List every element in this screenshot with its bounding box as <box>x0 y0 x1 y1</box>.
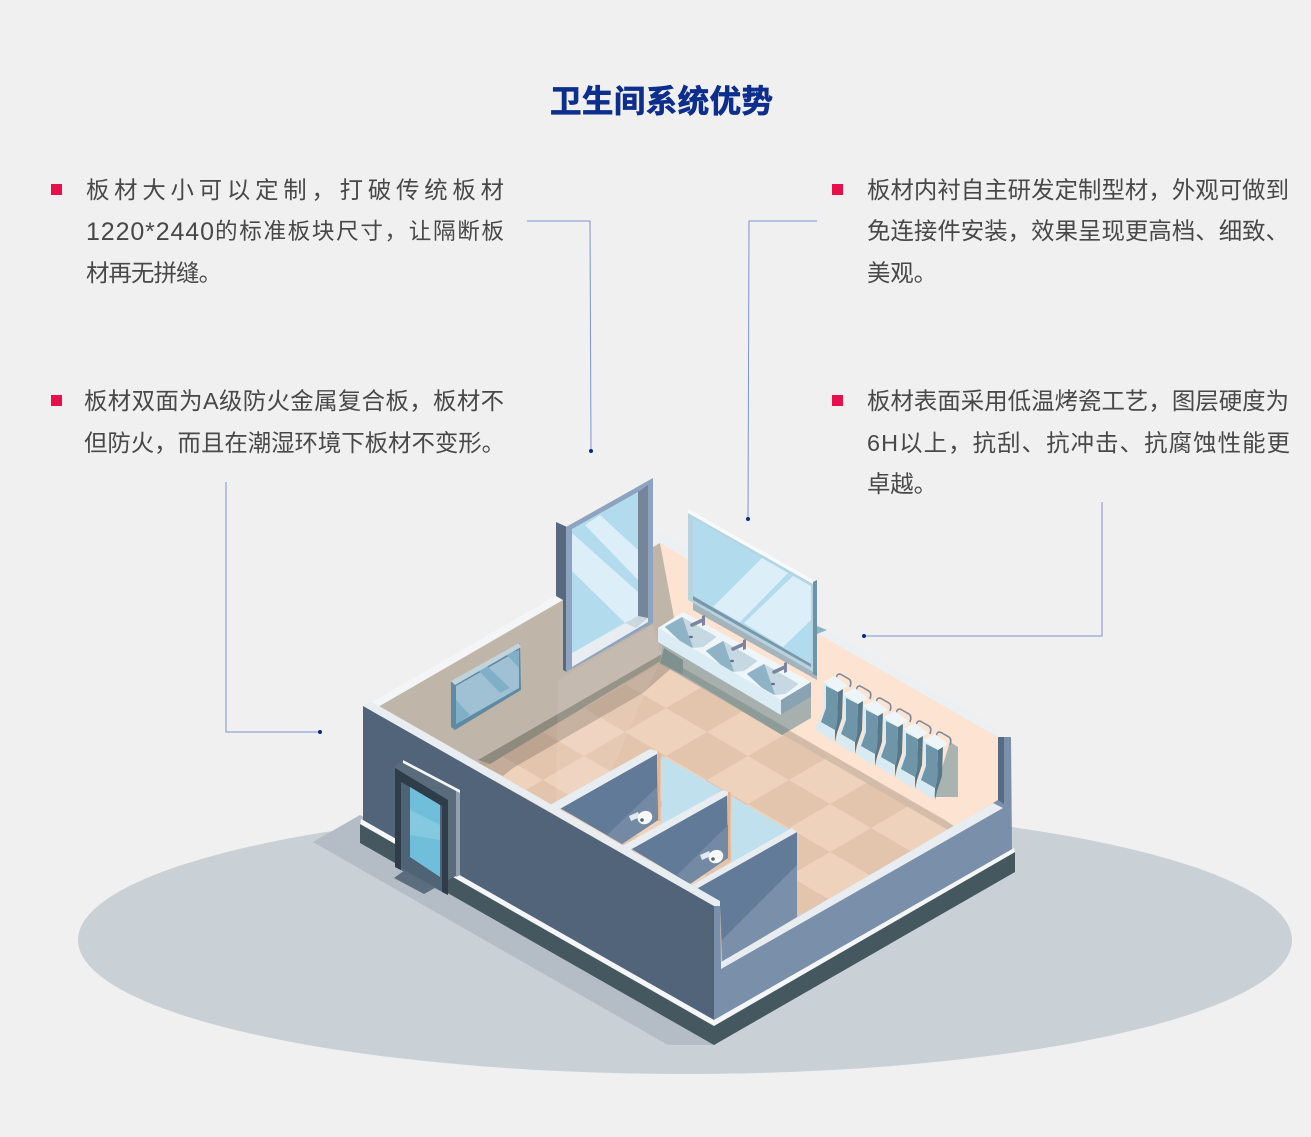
dark wall-floor seam <box>478 654 662 764</box>
urinals row <box>816 674 951 800</box>
stall 3 <box>692 828 797 962</box>
icon: toilet roll <box>700 848 725 866</box>
right front wall <box>714 737 1012 1021</box>
floor tiles <box>478 657 955 960</box>
building long shadow <box>313 815 714 1045</box>
text block: custom panel size: 板材大小可以定制，打破传统板材 <box>86 177 504 203</box>
icon: basin 3 <box>748 662 797 694</box>
window light beam <box>556 625 662 806</box>
text block: custom panel size: 1220*2440 <box>86 218 214 246</box>
text block: enamel surface <box>832 388 1290 497</box>
text block: lining profile: 板材内衬自主研发定制型材，外观可做到 <box>867 177 1289 203</box>
floor shadow near left wall <box>478 657 675 776</box>
sink counter <box>658 612 811 715</box>
left wall top cap <box>363 702 720 906</box>
text block: custom panel size: 材再无拼缝。 <box>86 260 222 286</box>
wall base shadow on right <box>660 657 955 830</box>
stall 1 <box>550 749 722 844</box>
text block: enamel surface: 6H以上，抗刮、抗冲击、抗腐蚀性能更 <box>867 430 1290 456</box>
text block: custom panel size <box>51 177 504 286</box>
peach wall top band <box>654 529 998 737</box>
leader line: top right <box>746 221 817 521</box>
small wall window <box>451 643 521 730</box>
leader line: lower left <box>226 482 322 734</box>
text block: fireproof panel: 但防火，而且在潮湿环境下板材不变形。 <box>84 430 505 456</box>
tall mirror window <box>556 478 653 672</box>
stall 2 <box>622 790 792 884</box>
ground ellipse <box>78 806 1292 1074</box>
mirror above sinks <box>688 509 827 680</box>
urinal shadow <box>933 742 958 797</box>
leader line: lower right <box>862 502 1102 638</box>
left back wall <box>378 543 674 763</box>
text block: enamel surface: 板材表面采用低温烤瓷工艺，图层硬度为 <box>867 388 1289 414</box>
building base <box>360 819 1015 1045</box>
leader line: top left <box>527 221 593 453</box>
title: 卫生间系统优势 <box>550 83 773 119</box>
icon: basin 1 <box>666 615 715 647</box>
text block: custom panel size: 的标准板块尺寸，让隔断板 <box>215 219 504 244</box>
text block: fireproof panel <box>51 388 505 456</box>
icon: toilet roll <box>629 809 654 827</box>
left front wall <box>363 706 714 1020</box>
text block: fireproof panel: 板材双面为A级防火金属复合板，板材不 <box>84 388 504 414</box>
text block: lining profile <box>832 177 1289 286</box>
text block: lining profile: 美观。 <box>867 260 937 286</box>
under-sink shadow <box>660 643 811 735</box>
door <box>394 760 460 895</box>
icon: basin 2 <box>707 639 756 671</box>
text block: enamel surface: 卓越。 <box>867 471 937 497</box>
text block: lining profile: 免连接件安装，效果呈现更高档、细致、 <box>867 218 1289 244</box>
peach back wall <box>660 543 998 827</box>
left wall top edge highlight <box>372 596 563 707</box>
